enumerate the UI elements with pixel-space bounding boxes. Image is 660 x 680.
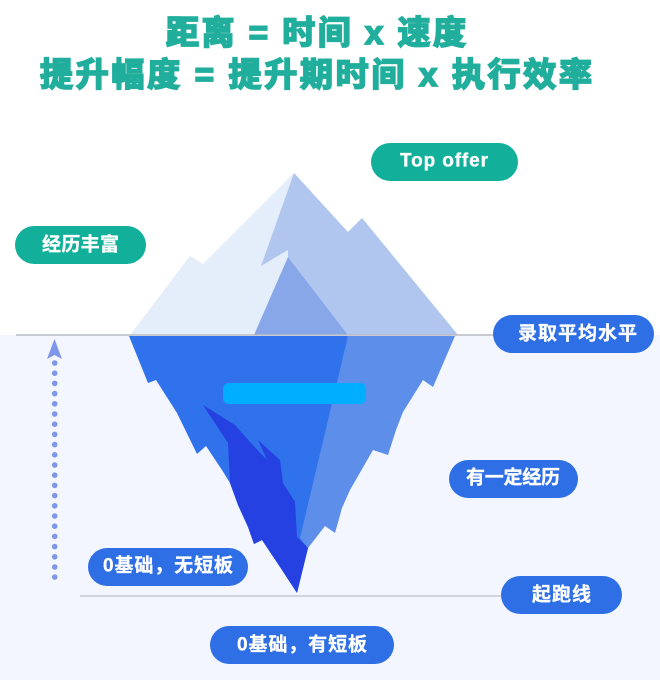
pill: 0基础，无短板: 0基础，无短板 — [103, 554, 233, 576]
iceberg below water — [129, 336, 455, 593]
pill: 起跑线: 起跑线 — [532, 584, 591, 606]
pill: Top offer — [371, 143, 518, 181]
title: 提升幅度 = 提升期时间 x 执行效率 — [40, 56, 592, 93]
iceberg above water — [130, 173, 458, 335]
pill: 有一定经历 — [449, 460, 578, 498]
pill: 0基础，有短板 — [210, 626, 394, 664]
title: 距离 = 时间 x 速度 — [166, 14, 466, 51]
hidden label bar — [223, 383, 366, 404]
pill: 0基础，有短板: 0基础，有短板 — [237, 634, 367, 656]
title — [40, 14, 592, 93]
pill: 录取平均水平: 录取平均水平 — [518, 322, 637, 344]
pill: 录取平均水平 — [493, 315, 654, 353]
pill: 经历丰富 — [15, 226, 146, 264]
pill: Top offer: Top offer — [400, 150, 489, 172]
pill: 起跑线 — [501, 576, 622, 614]
pill: 有一定经历: 有一定经历 — [466, 466, 560, 488]
dotted upward arrow — [47, 339, 62, 580]
pill: 经历丰富: 经历丰富 — [42, 232, 119, 256]
pill: 0基础，无短板 — [88, 548, 248, 586]
